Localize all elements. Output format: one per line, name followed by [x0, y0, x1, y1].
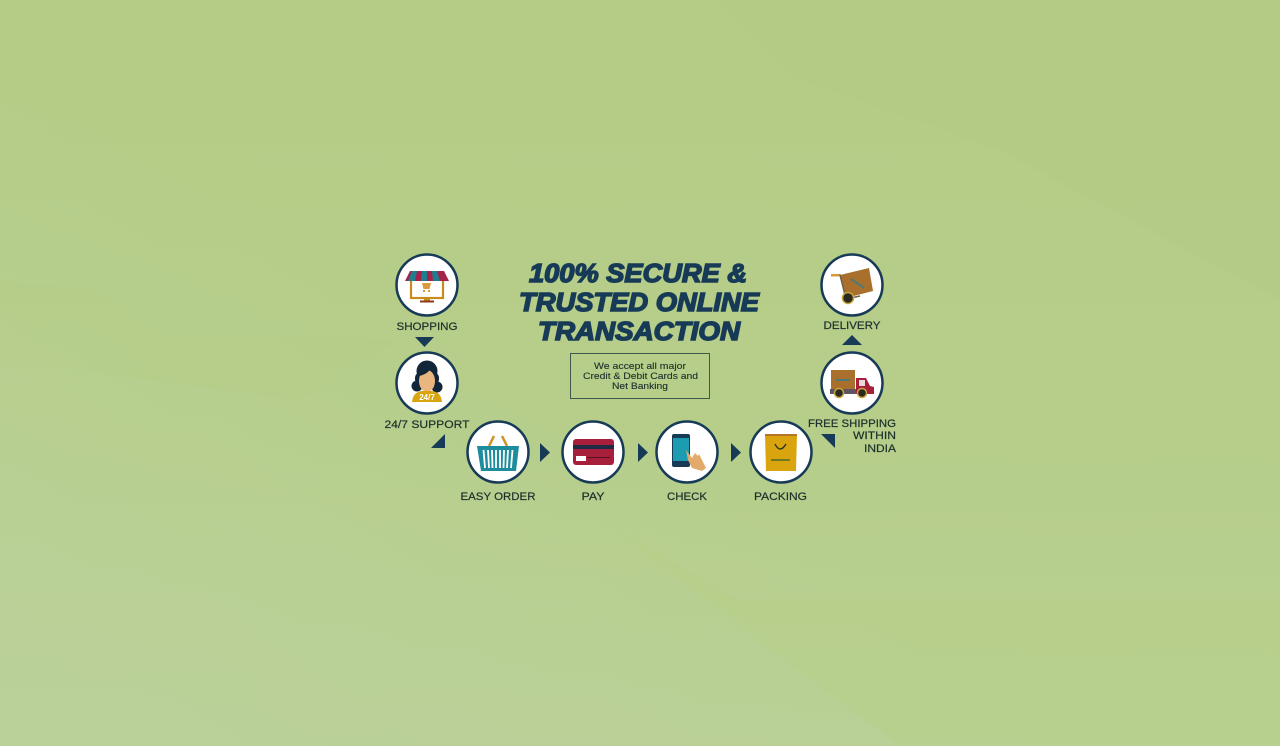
icon: shopping bag	[765, 434, 797, 471]
icon: credit card	[573, 439, 614, 465]
title: TRUSTED ONLINE	[519, 287, 760, 317]
step: free shipping	[808, 352, 897, 455]
label: DELIVERY	[824, 320, 881, 332]
payment note box: We accept all major	[594, 361, 686, 372]
step: packing	[750, 422, 812, 503]
label: PAY	[582, 491, 605, 503]
icon: phone and hand	[672, 434, 706, 471]
icon: delivery truck	[830, 370, 874, 398]
step: shopping	[396, 254, 458, 333]
title	[519, 258, 760, 346]
label: SHOPPING	[396, 321, 458, 333]
title: 100% SECURE &	[529, 258, 747, 288]
label: CHECK	[667, 491, 708, 503]
label: FREE SHIPPING	[808, 418, 896, 430]
icon: hand trolley with crate	[831, 268, 873, 304]
step: delivery	[822, 254, 882, 332]
label	[808, 418, 897, 455]
label: PACKING	[754, 491, 807, 503]
arrow: shopping to support	[415, 337, 434, 347]
payment note box	[570, 354, 710, 398]
arrow: check to packing	[731, 443, 741, 462]
label: 24/7 SUPPORT	[384, 419, 470, 431]
step: 24/7 support	[384, 352, 470, 431]
step: easy order	[460, 422, 536, 503]
step: check	[656, 422, 718, 503]
payment note box: Credit & Debit Cards and	[583, 371, 698, 382]
icon: storefront monitor	[405, 271, 449, 302]
arrow: pay to check	[638, 443, 648, 462]
label: EASY ORDER	[460, 491, 536, 503]
icon: basket	[477, 436, 519, 471]
arrow: support to easy order	[431, 434, 445, 448]
label: INDIA	[864, 443, 897, 455]
arrow: order to pay	[540, 443, 550, 462]
arrow: shipping to delivery	[842, 335, 862, 345]
icon: support agent: 24/7	[419, 393, 435, 402]
label: WITHIN	[853, 430, 896, 442]
payment note box: Net Banking	[612, 381, 668, 392]
arrow: packing to shipping	[821, 434, 835, 448]
step: pay	[562, 422, 624, 503]
title: TRANSACTION	[538, 316, 741, 346]
